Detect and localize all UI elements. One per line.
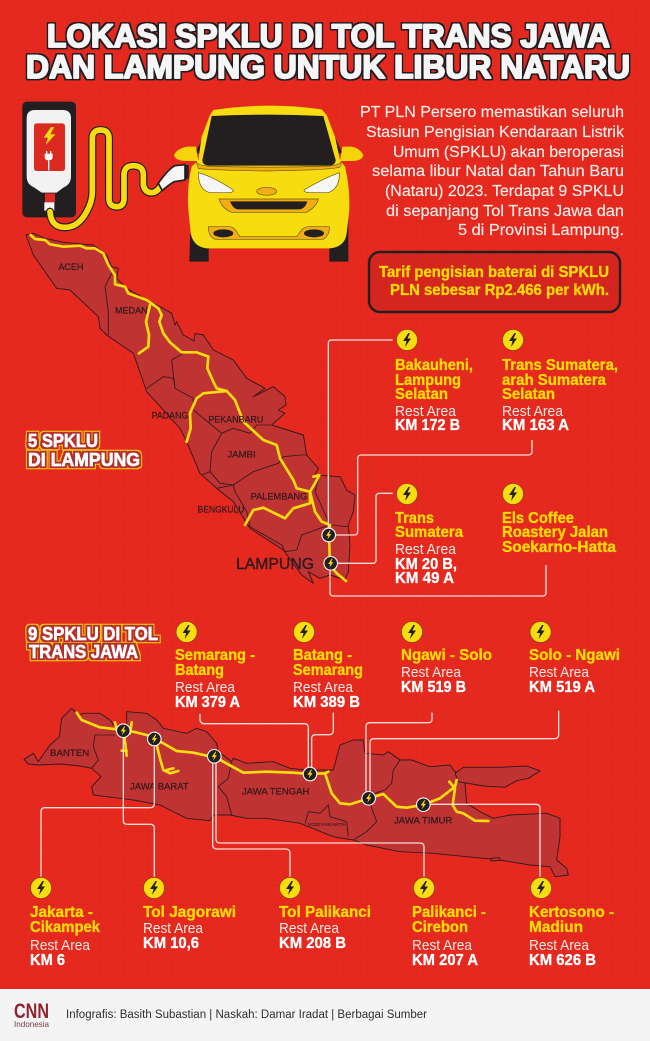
- icon: bolt: [402, 622, 422, 642]
- card: Tol Jagorawi: [143, 878, 236, 952]
- card: Bakauheni: Selatan: [395, 386, 448, 403]
- Sumatra province labels: JAMBI: [227, 450, 256, 460]
- card: Tol Palikanci: Tol Palikanci: [279, 904, 371, 921]
- card: Ngawi - Solo: Rest Area: [401, 665, 462, 681]
- icon: bolt: [502, 484, 524, 504]
- icon: bolt: [530, 878, 552, 898]
- icon: bolt: [280, 878, 300, 898]
- badge: 9 SPKLU di Tol Trans Jawa: [28, 624, 158, 662]
- intro text: Umum (SPKLU) akan beroperasi: [393, 144, 624, 161]
- card: Semarang - Batang: [175, 622, 255, 711]
- card: Trans Sumatera: Sumatera: [395, 524, 463, 541]
- card: Kertosono - Madiun: KM 626 B: [529, 952, 596, 969]
- badge: 9 SPKLU di Tol Trans Jawa: TRANS JAWA: [29, 642, 138, 662]
- card: Jakarta - Cikampek: Rest Area: [30, 938, 91, 954]
- credits: Infografis: Basith Subastian | Naskah: Damar Iradat | Berbagai Sumber: [66, 1009, 427, 1021]
- title: DAN LAMPUNG UNTUK LIBUR NATARU: [26, 49, 630, 85]
- map: Java: [24, 708, 568, 877]
- card: Trans Sumatera arah Sumatera Selatan: Rest Area: [502, 404, 564, 420]
- card: Kertosono - Madiun: Kertosono -: [529, 904, 614, 921]
- callout: tariff: Tarif pengisian baterai di SPKLU: [379, 264, 609, 281]
- card: Solo - Ngawi: KM 519 A: [529, 679, 595, 696]
- map: Sumatra: [26, 233, 355, 583]
- Sumatra province labels: MEDAN: [115, 305, 148, 315]
- leader lines: Lampung: [328, 340, 546, 596]
- card: Solo - Ngawi: Rest Area: [529, 665, 590, 681]
- Java province labels: BANTEN: [50, 748, 89, 758]
- card: Els Coffee: Roastery Jalan: [502, 524, 608, 541]
- icon: bolt: [294, 622, 314, 642]
- card: Kertosono - Madiun: Madiun: [529, 919, 583, 936]
- card: Els Coffee: [502, 484, 616, 556]
- card: Palikanci - Cirebon: KM 207 A: [412, 952, 478, 969]
- card: Trans Sumatera: KM 49 A: [395, 570, 454, 587]
- intro text: 5 di Provinsi Lampung.: [458, 222, 624, 239]
- card: Tol Palikanci: [279, 878, 371, 952]
- icon: bolt: [30, 878, 52, 898]
- intro text: Stasiun Pengisian Kendaraan Listrik: [366, 124, 625, 141]
- card: Ngawi - Solo: KM 519 B: [401, 679, 466, 696]
- callout: tariff: PLN sebesar Rp2.466 per kWh.: [390, 282, 609, 299]
- icon: bolt: [502, 330, 524, 350]
- Sumatra province labels: ACEH: [58, 262, 83, 272]
- card: Jakarta - Cikampek: Jakarta -: [30, 904, 93, 921]
- card: Solo - Ngawi: [529, 622, 620, 696]
- badge: 9 SPKLU di Tol Trans Jawa: 9 SPKLU DI TOL: [28, 624, 158, 644]
- card: Bakauheni: Rest Area: [395, 404, 457, 420]
- badge: 5 SPKLU di Lampung: DI LAMPUNG: [28, 450, 140, 470]
- card: Semarang - Batang: Semarang -: [175, 647, 255, 664]
- card: Trans Sumatera arah Sumatera Selatan: Trans Sumatera,: [502, 357, 618, 374]
- card: Bakauheni: Lampung: [395, 372, 461, 389]
- badge: 5 SPKLU di Lampung: 5 SPKLU: [28, 431, 98, 451]
- card: Kertosono - Madiun: Rest Area: [529, 938, 590, 954]
- card: Tol Palikanci: KM 208 B: [279, 935, 346, 952]
- Java province labels: JAWA TENGAH: [242, 787, 309, 797]
- logo: CNN Indonesia: CNN: [14, 1000, 49, 1023]
- card: Palikanci - Cirebon: Rest Area: [412, 938, 473, 954]
- card: Trans Sumatera arah Sumatera Selatan: Selatan: [502, 386, 555, 403]
- markers: Java SPKLU points: [116, 724, 430, 812]
- icon: bolt: [530, 622, 551, 642]
- card: Jakarta - Cikampek: Cikampek: [30, 919, 100, 936]
- logo: CNN Indonesia: Indonesia: [14, 1019, 49, 1029]
- callout: tariff: [369, 252, 620, 312]
- Java province labels: JAWA BARAT: [130, 781, 189, 791]
- card: Trans Sumatera: [395, 484, 463, 587]
- Java province labels: JAWA TIMUR: [394, 815, 453, 825]
- card: Jakarta - Cikampek: [30, 878, 100, 969]
- card: Els Coffee: Soekarno-Hatta: [502, 539, 616, 556]
- card: Els Coffee: Els Coffee: [502, 510, 574, 527]
- title: [26, 18, 630, 85]
- card: Kertosono - Madiun: [529, 878, 614, 969]
- icon: bolt: [414, 878, 434, 898]
- logo: CNN Indonesia: [14, 1000, 49, 1029]
- intro text: selama libur Natal dan Tahun Baru: [372, 163, 624, 180]
- card: Batang - Semarang: [293, 622, 363, 711]
- icon: bolt: [396, 484, 418, 504]
- card: Tol Jagorawi: Tol Jagorawi: [143, 904, 236, 921]
- icon: bolt: [396, 330, 418, 350]
- intro text: PT PLN Persero memastikan seluruh: [360, 104, 624, 121]
- card: Trans Sumatera: Rest Area: [395, 542, 457, 558]
- Sumatra province labels: [58, 262, 314, 573]
- card: Trans Sumatera: KM 20 B,: [395, 556, 457, 573]
- intro text: [360, 104, 625, 239]
- icon: bolt: [176, 622, 197, 642]
- Sumatra province labels: PADANG: [152, 410, 188, 420]
- card: Tol Jagorawi: Rest Area: [143, 921, 204, 937]
- leader lines: Java: [41, 711, 559, 877]
- icon: bolt: [144, 878, 164, 898]
- card: Batang - Semarang: Rest Area: [293, 680, 354, 696]
- card: Palikanci - Cirebon: Cirebon: [412, 919, 468, 936]
- card: Semarang - Batang: KM 379 A: [175, 694, 240, 711]
- card: Bakauheni: Bakauheni,: [395, 357, 473, 374]
- card: Tol Palikanci: Rest Area: [279, 921, 340, 937]
- card: Semarang - Batang: Rest Area: [175, 680, 236, 696]
- card: Trans Sumatera arah Sumatera Selatan: arah Sumatera: [502, 372, 606, 389]
- card: Solo - Ngawi: Solo - Ngawi: [529, 647, 620, 664]
- card: Batang - Semarang: KM 389 B: [293, 694, 360, 711]
- marker: Lampung south: [324, 556, 338, 570]
- footer: [0, 989, 650, 1041]
- marker: Lampung north: [322, 528, 336, 542]
- intro text: di sepanjang Tol Trans Jawa dan: [386, 203, 624, 220]
- card: Bakauheni: KM 172 B: [395, 417, 460, 434]
- Sumatra province labels: LAMPUNG: [236, 556, 314, 573]
- card: Batang - Semarang: Semarang: [293, 662, 363, 679]
- Sumatra province labels: PALEMBANG: [251, 491, 307, 501]
- Sumatra province labels: PEKANBARU: [208, 415, 264, 425]
- badge: 5 SPKLU di Lampung: [28, 431, 140, 470]
- card: Ngawi - Solo: Ngawi - Solo: [401, 647, 492, 664]
- icon: charging cable: [50, 130, 189, 227]
- icon: yellow car: [174, 106, 363, 262]
- card: Palikanci - Cirebon: [412, 878, 486, 969]
- Java province labels: [50, 748, 453, 828]
- card: Batang - Semarang: Batang -: [293, 647, 352, 664]
- card: Tol Jagorawi: KM 10,6: [143, 935, 199, 952]
- intro text: (Nataru) 2023. Terdapat 9 SPKLU: [385, 183, 624, 200]
- title: LOKASI SPKLU DI TOL TRANS JAWA: [47, 18, 610, 54]
- Sumatra province labels: BENGKULU: [198, 504, 245, 514]
- Java toll roads: [77, 713, 488, 821]
- card: Ngawi - Solo: [401, 622, 492, 696]
- card: Trans Sumatera: Trans: [395, 510, 434, 527]
- card: Jakarta - Cikampek: KM 6: [30, 952, 65, 969]
- icon: charging station: [22, 102, 76, 217]
- Sumatra toll roads: [31, 235, 346, 581]
- card: Trans Sumatera arah Sumatera Selatan: KM 163 A: [502, 417, 569, 434]
- card: Palikanci - Cirebon: Palikanci -: [412, 904, 486, 921]
- card: Bakauheni: [395, 330, 473, 434]
- card: Trans Sumatera arah Sumatera Selatan: [502, 330, 618, 434]
- card: Semarang - Batang: Batang: [175, 662, 224, 679]
- Java province labels: YOGYAKARTA: [307, 822, 347, 828]
